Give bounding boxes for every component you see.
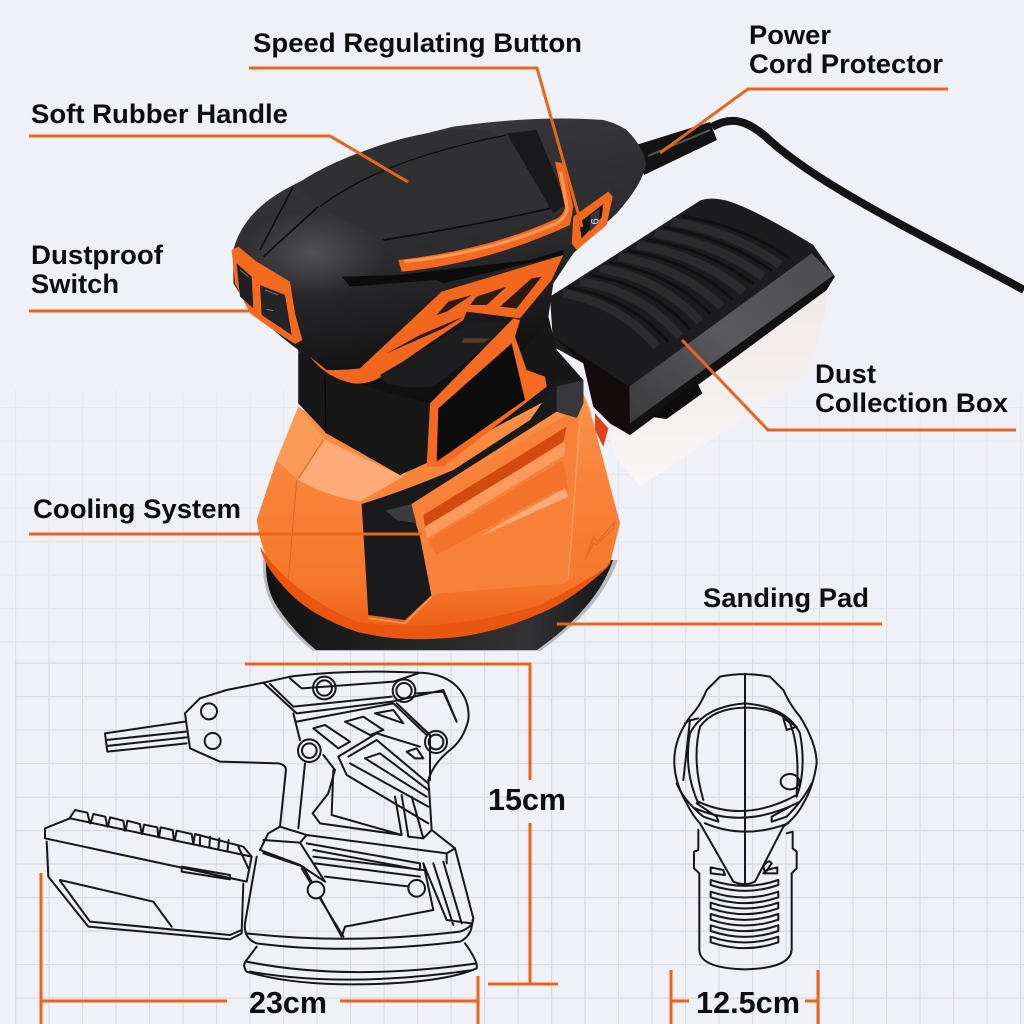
side view lattice xyxy=(313,710,428,823)
label: Soft Rubber Handle: Soft Rubber Handle xyxy=(31,99,288,129)
vents xyxy=(412,415,578,597)
lid xyxy=(550,199,835,435)
dimension: width 12.5cm: 12.5cm xyxy=(696,985,800,1020)
blueprint grid lower xyxy=(15,660,1024,1024)
label: Dustproof Switch: Dustproof xyxy=(31,240,164,270)
side view base xyxy=(247,827,473,939)
blueprint grid upper xyxy=(0,446,1024,660)
textured grip xyxy=(293,128,550,240)
line drawing: front view xyxy=(674,674,817,969)
label: Dust Collection Box xyxy=(682,340,1016,430)
orange lattice xyxy=(310,255,563,384)
label: Power Cord Protector: Cord Protector xyxy=(749,49,943,79)
lid front band xyxy=(629,253,834,423)
orange base housing xyxy=(257,353,620,639)
side view dust box xyxy=(45,818,252,939)
window xyxy=(437,343,525,462)
label: Speed Regulating Button: Speed Regulating Button xyxy=(253,28,582,58)
latch xyxy=(650,382,702,419)
dark lattice panel xyxy=(380,322,507,387)
label: Power Cord Protector xyxy=(660,20,948,153)
arrow mark xyxy=(585,522,615,560)
vent panel xyxy=(362,380,615,623)
black band xyxy=(362,380,583,620)
label: Dustproof Switch xyxy=(29,240,252,311)
label: Cooling System: Cooling System xyxy=(33,494,241,524)
head shadow band xyxy=(342,250,563,287)
side view neck xyxy=(298,755,432,838)
label: Power Cord Protector: Power xyxy=(749,20,831,50)
head highlight xyxy=(243,210,383,297)
clear dust bin xyxy=(607,290,827,487)
label: Soft Rubber Handle xyxy=(29,99,408,182)
handle and motor body xyxy=(233,118,646,475)
dustproof switch xyxy=(232,247,302,344)
dimension: height 15cm: 15cm xyxy=(488,782,566,817)
lid ribs xyxy=(563,222,780,347)
speed regulating button xyxy=(572,192,613,250)
label: Dust Collection Box: Dust xyxy=(815,359,876,389)
dimension: height 15cm xyxy=(245,664,566,984)
dust collection box xyxy=(550,199,835,487)
side view top details xyxy=(263,673,457,780)
dimension: width 12.5cm xyxy=(671,970,818,1024)
orange trim stripe xyxy=(398,162,573,272)
motor neck details xyxy=(232,247,563,467)
label: Speed Regulating Button xyxy=(249,28,582,227)
label: Dustproof Switch: Switch xyxy=(31,269,119,299)
power cord xyxy=(636,121,1024,290)
dimension: length 23cm xyxy=(41,873,478,1024)
handle and motor body: 6 xyxy=(590,218,602,225)
window frame xyxy=(427,318,547,467)
side view pad xyxy=(244,943,477,984)
label: Sanding Pad: Sanding Pad xyxy=(703,583,869,613)
line drawing: side view xyxy=(45,672,477,984)
neck shading xyxy=(298,317,583,475)
red bracket xyxy=(595,413,608,447)
side view outline xyxy=(185,672,473,949)
sanding pad xyxy=(263,560,618,651)
dimension: length 23cm: 23cm xyxy=(249,985,327,1020)
label: Dust Collection Box: Collection Box xyxy=(815,388,1008,418)
lid shaded side xyxy=(553,337,630,435)
side view cord xyxy=(105,722,187,752)
